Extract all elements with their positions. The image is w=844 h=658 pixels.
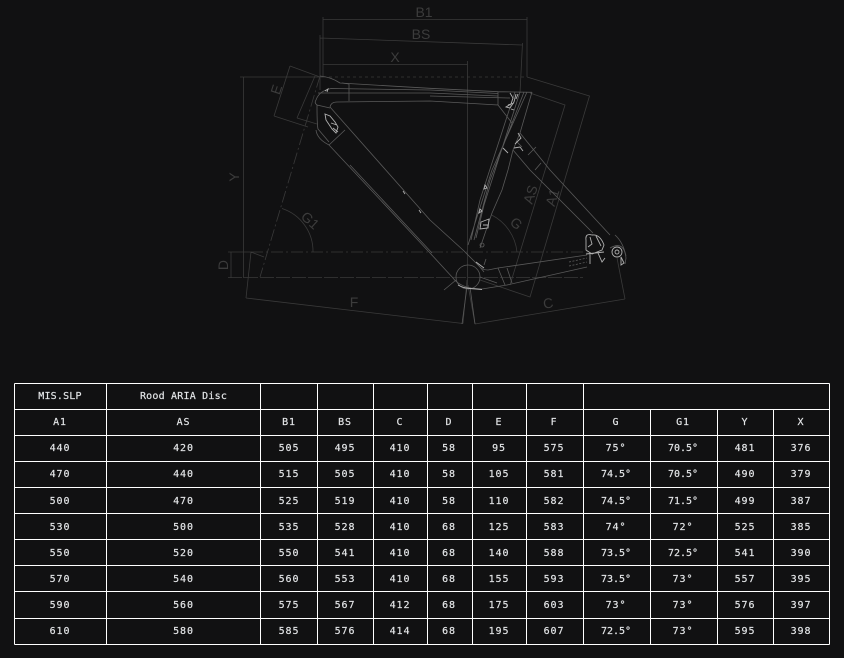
row 500: 110 [489, 496, 509, 507]
dimension F: F [350, 294, 358, 310]
head tube detail [325, 89, 338, 133]
row 570: 395 [791, 574, 811, 585]
row 590: 560 [173, 600, 194, 611]
row 550: 410 [390, 548, 410, 559]
row 470: 490 [735, 469, 755, 480]
row 610: 195 [489, 626, 509, 637]
column headers: G1 [676, 417, 690, 428]
row 440: 505 [279, 443, 299, 454]
row 550: 541 [735, 548, 755, 559]
row 530: 583 [544, 522, 564, 533]
row 590: 73° [673, 600, 693, 611]
top tube [316, 76, 532, 123]
dimension BS [320, 26, 522, 93]
row 570: 410 [390, 574, 410, 585]
row 440: 95 [492, 443, 506, 454]
row 470: 74.5° [601, 469, 631, 480]
row 470: 440 [173, 469, 194, 480]
dimension Y: Y [226, 172, 242, 182]
angle G1 [282, 208, 323, 252]
geometry table [14, 384, 830, 644]
row 570: 68 [442, 574, 456, 585]
mid down tube marks [403, 191, 421, 213]
dimension A1 [480, 77, 590, 297]
row 610: 73° [673, 626, 693, 637]
row 500: 71.5° [668, 496, 698, 507]
row 500: 582 [544, 496, 564, 507]
bottom bracket shell [444, 262, 497, 324]
row 440: 481 [735, 443, 755, 454]
row 530: 500 [173, 522, 194, 533]
diagram: bicycle frame geometry [215, 4, 626, 324]
dimension BS: BS [412, 26, 430, 42]
dimension D: D [215, 260, 231, 270]
column headers: E [496, 417, 502, 428]
dimension D [215, 252, 251, 278]
column headers: G [613, 417, 619, 428]
row 440: 440 [50, 443, 70, 454]
row 500: 58 [442, 496, 456, 507]
row 610: 607 [544, 626, 564, 637]
dimension X [323, 49, 468, 287]
row 470: 470 [50, 469, 70, 480]
row 440: 410 [390, 443, 410, 454]
row 590: 576 [735, 600, 755, 611]
row 530: 385 [791, 522, 811, 533]
row 570: 557 [735, 574, 755, 585]
row 590: 603 [544, 600, 564, 611]
chain stays [476, 255, 587, 289]
row 470 [50, 469, 811, 480]
dimension C [468, 258, 625, 324]
row 550: 72.5° [668, 548, 698, 559]
row 570: 73.5° [601, 574, 631, 585]
row 530: 528 [335, 522, 355, 533]
rear dropout detail [569, 235, 626, 266]
row 570: 553 [335, 574, 355, 585]
dimension X: X [390, 49, 400, 65]
row 590: 412 [390, 600, 410, 611]
row 500: 387 [791, 496, 811, 507]
table title row: Rood ARIA Disc [140, 391, 227, 402]
table title row: MIS.SLP [38, 391, 82, 402]
dimension E: E [267, 83, 285, 96]
column headers: Y [742, 417, 748, 428]
dimension A1: A1 [542, 187, 563, 208]
row 550: 588 [544, 548, 564, 559]
row 610: 610 [50, 626, 70, 637]
row 530: 535 [279, 522, 299, 533]
row 440: 58 [442, 443, 456, 454]
row 500: 525 [279, 496, 299, 507]
row 590: 397 [791, 600, 811, 611]
row 470: 410 [390, 469, 410, 480]
row 590: 567 [335, 600, 355, 611]
row 440: 420 [173, 443, 194, 454]
row 550: 550 [50, 548, 70, 559]
row 570: 540 [173, 574, 194, 585]
row 590: 575 [279, 600, 299, 611]
dimension B1: B1 [415, 4, 433, 20]
dimension Y [226, 77, 527, 278]
head tube [315, 83, 349, 145]
down tube [329, 107, 488, 289]
row 610 [50, 626, 811, 637]
row 470: 379 [791, 469, 811, 480]
row 440 [50, 443, 811, 454]
row 590: 175 [489, 600, 509, 611]
row 610: 414 [390, 626, 410, 637]
row 530: 525 [735, 522, 755, 533]
row 440: 70.5° [668, 443, 698, 454]
dimension E [267, 66, 320, 127]
row 610: 576 [335, 626, 355, 637]
row 530: 410 [390, 522, 410, 533]
row 470: 58 [442, 469, 456, 480]
column headers: X [798, 417, 804, 428]
row 500: 500 [50, 496, 70, 507]
dimension AS: AS [520, 183, 541, 206]
seat cluster detail [503, 93, 523, 153]
seat tube [468, 92, 532, 248]
row 610: 68 [442, 626, 456, 637]
row 570: 593 [544, 574, 564, 585]
row 530: 74° [606, 522, 626, 533]
dimension F [246, 252, 467, 324]
row 590: 590 [50, 600, 70, 611]
row 570: 73° [673, 574, 693, 585]
row 530: 72° [673, 522, 693, 533]
column headers: B1 [282, 417, 296, 428]
row 500: 519 [335, 496, 355, 507]
row 610: 580 [173, 626, 194, 637]
seat tube cable detail [479, 185, 489, 265]
row 500 [50, 496, 811, 507]
row 470: 505 [335, 469, 355, 480]
row 500: 499 [735, 496, 755, 507]
row 500: 470 [173, 496, 194, 507]
column headers [53, 417, 804, 428]
frame outline [315, 76, 610, 324]
row 530: 530 [50, 522, 70, 533]
row 530 [50, 522, 811, 533]
column headers: C [397, 417, 403, 428]
dimension AS [510, 93, 565, 285]
row 440: 75° [606, 443, 626, 454]
row 610: 585 [279, 626, 299, 637]
angle G [492, 214, 526, 252]
row 590: 68 [442, 600, 456, 611]
row 610: 72.5° [601, 626, 631, 637]
row 550: 73.5° [601, 548, 631, 559]
row 470: 70.5° [668, 469, 698, 480]
axis lines [228, 76, 590, 278]
row 550: 390 [791, 548, 811, 559]
row 550: 541 [335, 548, 355, 559]
row 440: 376 [791, 443, 811, 454]
row 570 [50, 574, 811, 585]
angle G: G [507, 214, 526, 233]
row 570: 560 [279, 574, 299, 585]
row 500: 410 [390, 496, 410, 507]
row 440: 575 [544, 443, 564, 454]
row 590 [50, 600, 811, 611]
column headers: D [446, 417, 452, 428]
row 470: 105 [489, 469, 509, 480]
column headers: AS [177, 417, 190, 428]
row 610: 398 [791, 626, 811, 637]
seat stays [513, 133, 610, 235]
row 470: 581 [544, 469, 564, 480]
row 550: 550 [279, 548, 299, 559]
row 470: 515 [279, 469, 299, 480]
column headers: F [551, 417, 557, 428]
row 440: 495 [335, 443, 355, 454]
row 500: 74.5° [601, 496, 631, 507]
row 530: 68 [442, 522, 456, 533]
angle G1: G1 [298, 208, 323, 233]
dimension C: C [542, 294, 555, 312]
row 550: 140 [489, 548, 509, 559]
table grid [14, 384, 830, 644]
column headers: A1 [53, 417, 67, 428]
dimension B1 [323, 4, 527, 77]
row 530: 125 [489, 522, 509, 533]
table title row [38, 391, 227, 402]
row 570: 570 [50, 574, 70, 585]
row 550: 520 [173, 548, 194, 559]
row 610: 595 [735, 626, 755, 637]
column headers: BS [338, 417, 352, 428]
row 590: 73° [606, 600, 626, 611]
row 570: 155 [489, 574, 509, 585]
row 550 [50, 548, 811, 559]
row 550: 68 [442, 548, 456, 559]
